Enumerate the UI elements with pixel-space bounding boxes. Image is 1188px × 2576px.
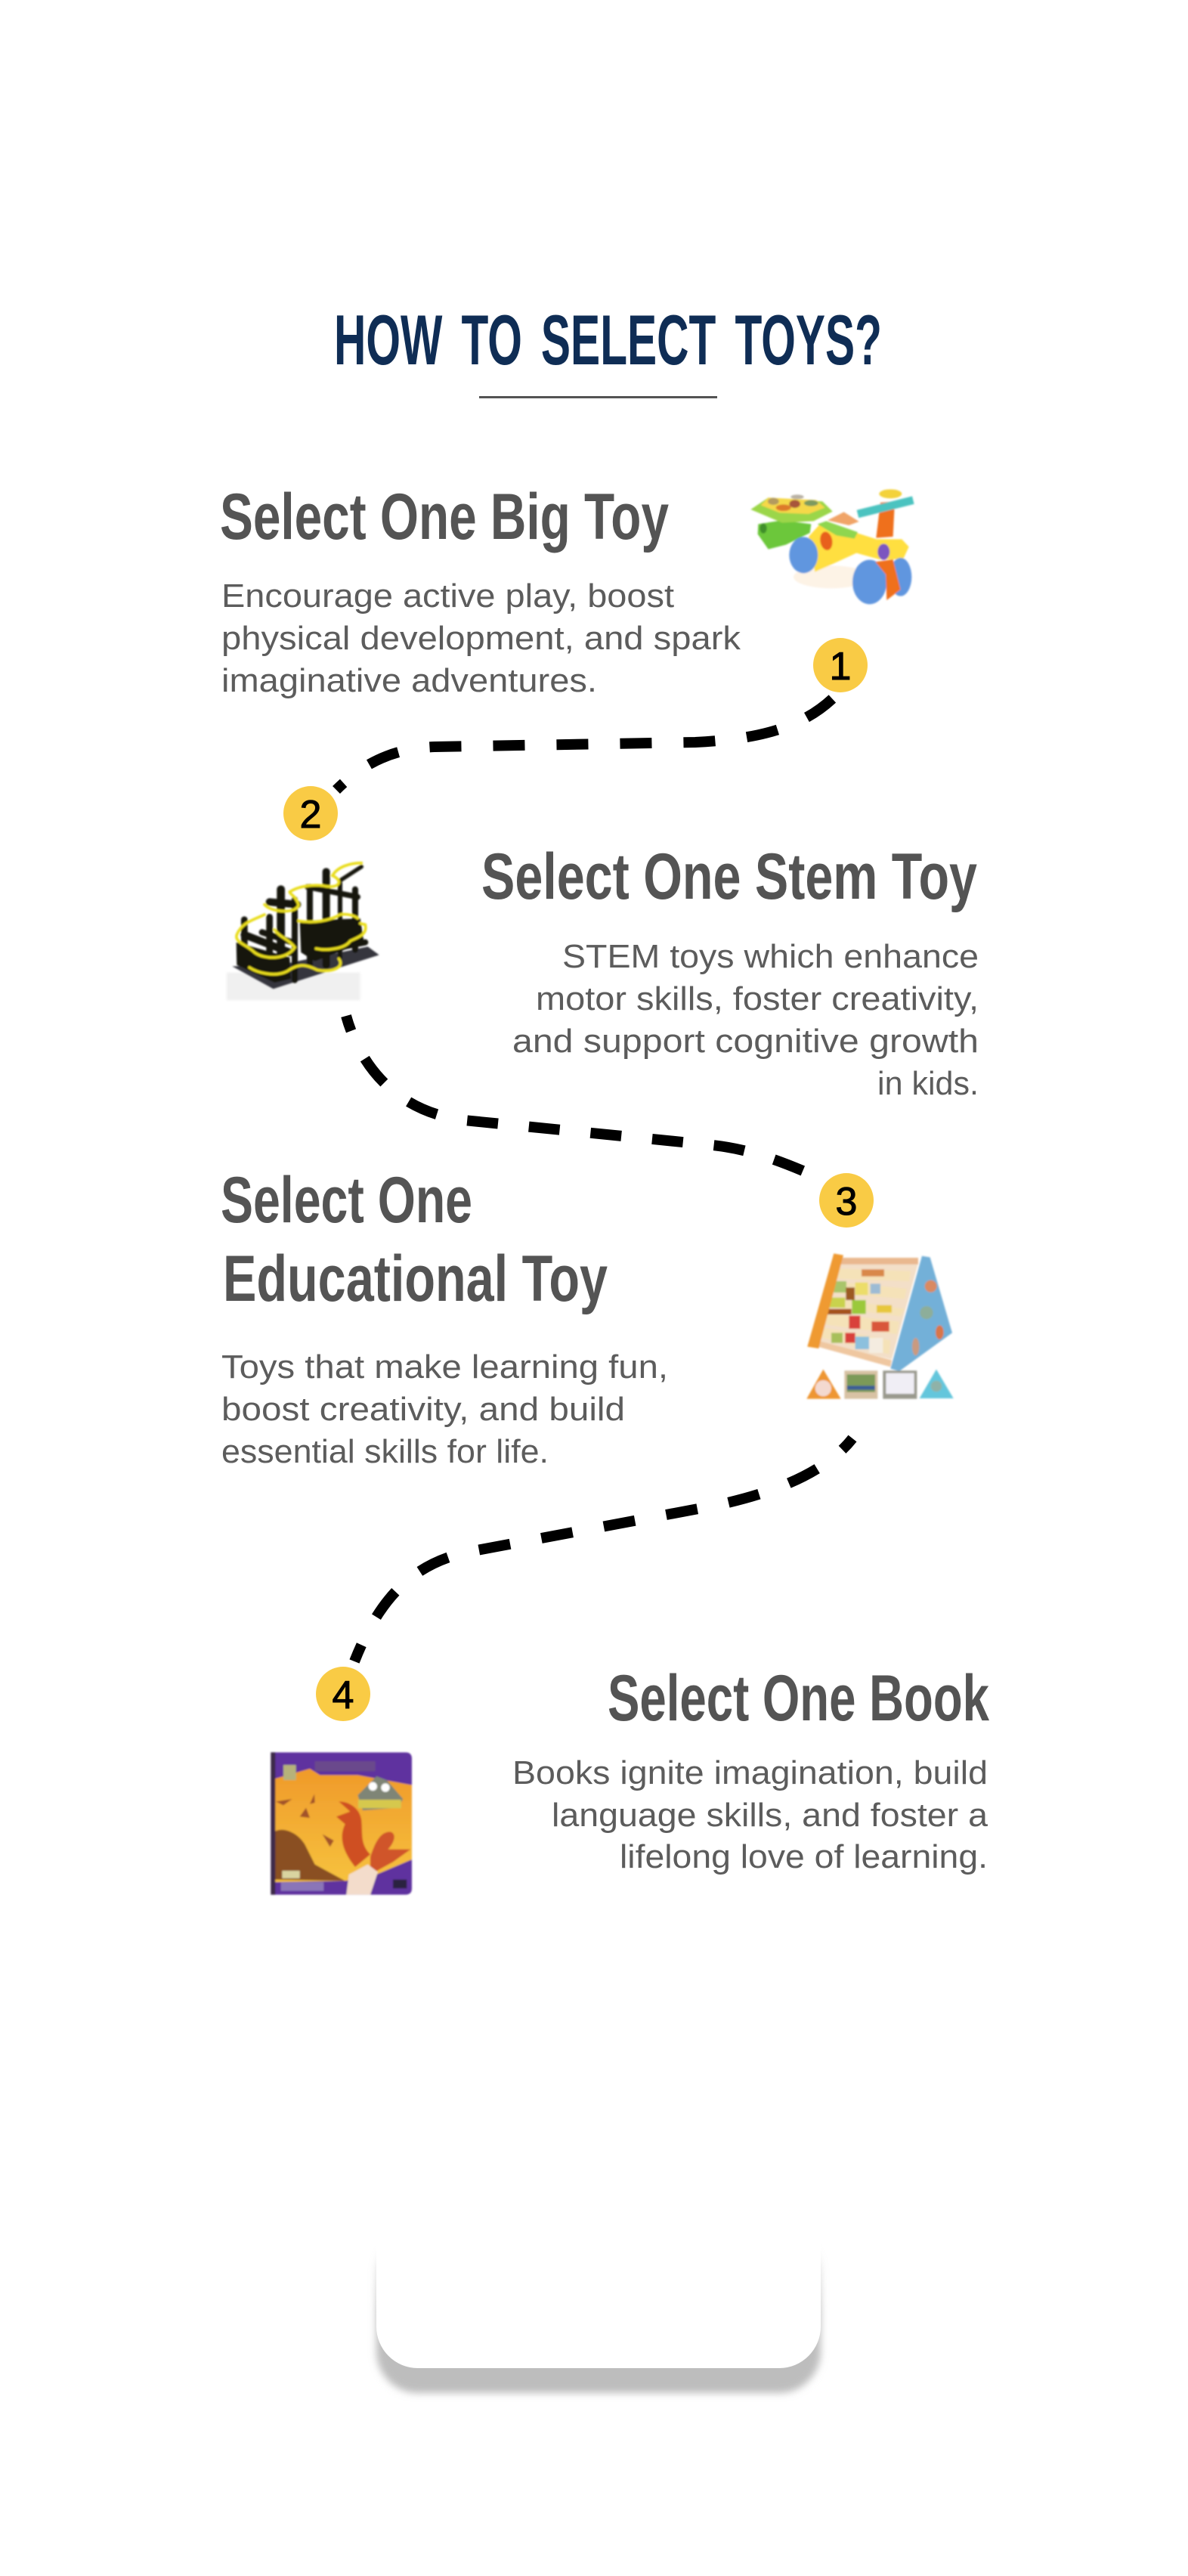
number badge 3 [819,1173,874,1228]
title underline [479,396,717,398]
number badge 1: 1 [830,645,851,689]
section 1: big toy [220,481,913,699]
text: stem toy description: in kids. [877,1065,979,1102]
number badge 1 [813,638,868,692]
title: HOW TO SELECT TOYS? [334,300,882,379]
icon: wooden activity triangle [806,1253,954,1399]
section 2: stem toy [227,786,979,1102]
number badge 3: 3 [836,1180,857,1224]
section 4: book [271,1662,989,1895]
dashed connector 2 to 3 [346,1016,810,1174]
heading: select one book: Select One Book [608,1662,989,1735]
text: big toy description [221,577,741,699]
number badge 4 [316,1667,370,1721]
number badge 4: 4 [333,1673,354,1717]
text: book description: lifelong love of learning. [620,1838,988,1875]
heading: select one educational toy: Select One [221,1164,472,1237]
icon: dinosaur book [271,1752,412,1895]
text: stem toy description: and support cognitive growth [512,1023,979,1060]
text: book description: language skills, and foster a [552,1797,988,1834]
text: big toy description: imaginative adventures. [221,662,597,699]
icon: marble run [227,863,379,1000]
text: educational toy description: essential skills for life. [221,1433,549,1470]
heading: select one big toy: Select One Big Toy [220,481,669,553]
text: big toy description: physical development, and spark [221,620,741,657]
number badge 2 [283,786,338,841]
heading: select one educational toy: Educational Toy [223,1243,608,1315]
text: book description [512,1754,988,1875]
number badge 2: 2 [300,793,321,837]
text: educational toy description: boost creativity, and build [221,1391,625,1428]
text: stem toy description: STEM toys which enhance [562,938,979,975]
text: stem toy description [512,938,979,1102]
heading: select one stem toy: Select One Stem Toy [481,841,977,913]
text: stem toy description: motor skills, foster creativity, [536,980,979,1017]
text: big toy description: Encourage active play, boost [221,577,674,615]
text: book description: Books ignite imagination, build [512,1754,988,1791]
text: educational toy description [221,1348,668,1470]
dashed connector 1 to 2 [336,696,835,790]
text: educational toy description: Toys that make learning fun, [221,1348,668,1386]
heading: select one educational toy [221,1164,608,1315]
icon: ride-on toy [750,489,913,604]
section 3: educational toy [221,1164,954,1470]
bottom rounded panel with drop shadow [376,2116,821,2393]
dashed connector 3 to 4 [354,1438,852,1661]
